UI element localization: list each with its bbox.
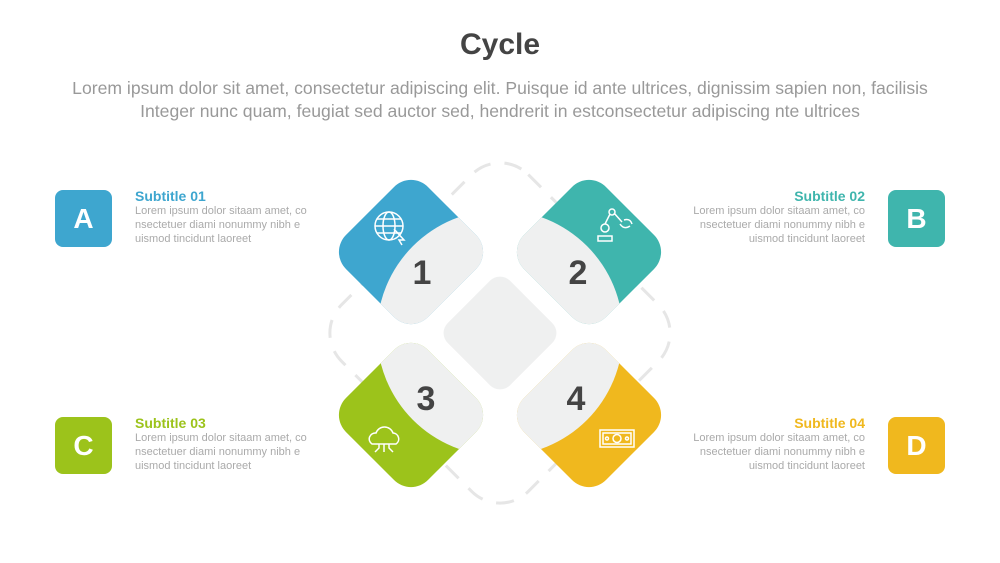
text 01: Lorem ipsum dolor sitaam amet, co nsectetuer diami nonummy nibh e uismod tincidunt laoreet	[135, 205, 307, 245]
icon: money	[600, 430, 634, 447]
petal 3	[338, 342, 484, 488]
box D	[888, 417, 945, 474]
box B: B	[906, 202, 927, 234]
numbers	[413, 254, 587, 418]
text 04: Lorem ipsum dolor sitaam amet, co nsectetuer diami nonummy nibh e uismod tincidunt laoreet	[693, 432, 865, 472]
icon: cloud	[369, 427, 399, 452]
description	[72, 78, 928, 121]
text 02: Lorem ipsum dolor sitaam amet, co nsectetuer diami nonummy nibh e uismod tincidunt laoreet	[693, 205, 865, 245]
box C	[55, 417, 112, 474]
description: Integer nunc quam, feugiat sed auctor sed, hendrerit in estconsectetur adipiscing nte ultrices	[140, 101, 860, 121]
text 03: Lorem ipsum dolor sitaam amet, co nsectetuer diami nonummy nibh e uismod tincidunt laoreet	[135, 432, 307, 472]
box A: A	[73, 202, 94, 234]
box A	[55, 190, 112, 247]
text 02: Subtitle 02	[794, 188, 865, 204]
center diamond	[438, 271, 562, 395]
numbers: 1	[413, 254, 431, 292]
text 01: Subtitle 01	[135, 188, 206, 204]
cycle diagram	[328, 162, 671, 504]
numbers: 4	[567, 380, 586, 418]
icon: robot arm	[598, 209, 632, 241]
petal 4	[516, 342, 662, 488]
numbers: 2	[569, 254, 587, 292]
icon: globe	[375, 212, 404, 245]
title: Cycle	[460, 28, 540, 61]
text 03: Subtitle 03	[135, 415, 206, 431]
box C: C	[73, 430, 94, 460]
numbers: 3	[417, 380, 435, 418]
description: Lorem ipsum dolor sit amet, consectetur adipiscing elit. Puisque id ante ultrices, dignissim sapien non, facilisis	[72, 78, 928, 98]
text 04: Subtitle 04	[794, 415, 865, 431]
box B	[888, 190, 945, 247]
box D: D	[906, 430, 927, 460]
petal 1	[338, 180, 484, 324]
petal 2	[516, 180, 662, 324]
